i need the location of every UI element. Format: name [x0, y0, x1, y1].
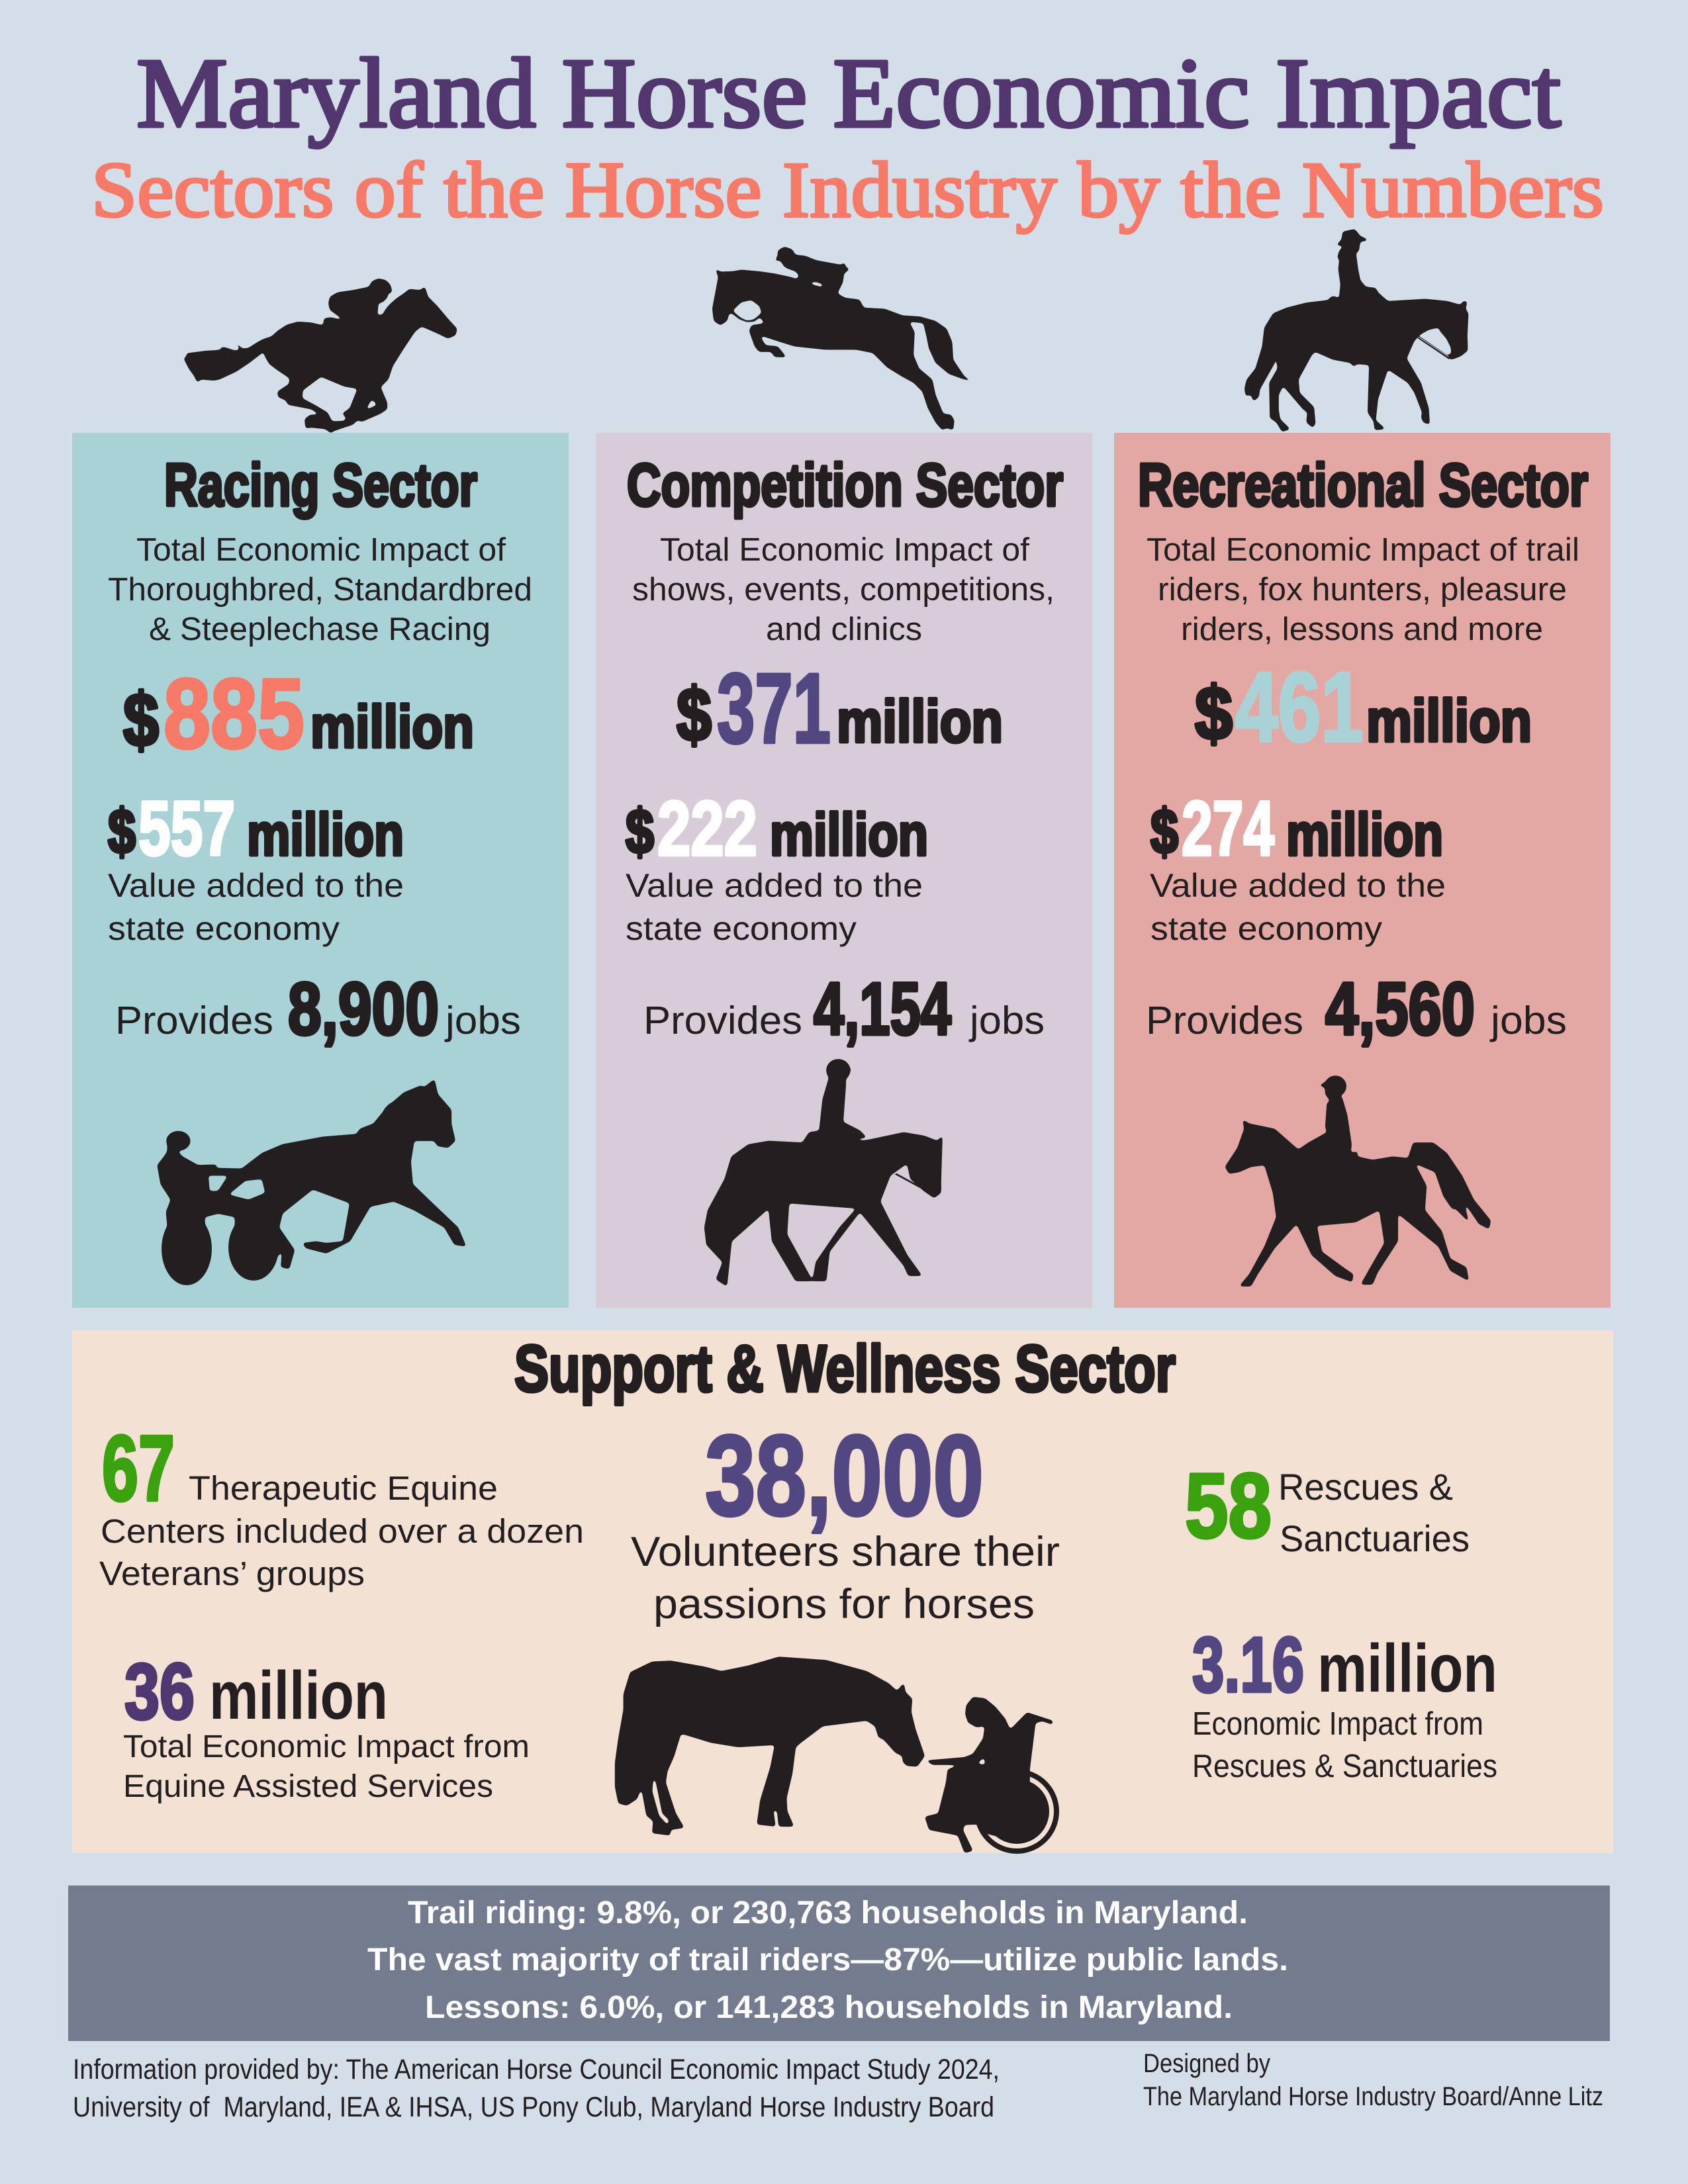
- rescues economic impact stat: Rescues & Sanctuaries: [1192, 1749, 1497, 1784]
- racing value added: $: [108, 797, 136, 867]
- recreational jobs: 4,560: [1325, 968, 1475, 1050]
- icon: pony and young rider: [1225, 1075, 1491, 1287]
- racing jobs: Provides: [115, 999, 273, 1042]
- equine assisted services stat: 36: [124, 1647, 195, 1736]
- heading: competition sector: Competition Sector: [627, 452, 1063, 519]
- icon: english rider walking: [704, 1059, 942, 1287]
- recreational jobs: [1146, 968, 1567, 1050]
- competition total impact: $: [677, 673, 712, 757]
- racing value added: state economy: [108, 910, 340, 947]
- panel: recreational sector: [1114, 433, 1611, 1308]
- heading: support and wellness sector: Support & Wellness Sector: [514, 1332, 1176, 1405]
- racing value added: 557: [138, 785, 235, 872]
- competition value added: state economy: [626, 910, 857, 947]
- rescues economic impact stat: 3.16: [1192, 1621, 1304, 1709]
- icon: horse with wheelchair user: [615, 1657, 1056, 1853]
- racing description: Thoroughbred, Standardbred: [108, 572, 532, 608]
- competition jobs: [643, 968, 1045, 1050]
- icon: western rider: [1244, 229, 1468, 432]
- therapeutic centers stat: Therapeutic Equine: [189, 1469, 498, 1507]
- rescues stat: Sanctuaries: [1280, 1518, 1470, 1559]
- rescues stat: [1185, 1455, 1470, 1559]
- recreational jobs: Provides: [1146, 999, 1303, 1042]
- recreational total impact: $: [1195, 672, 1233, 756]
- rescues economic impact stat: Economic Impact from: [1192, 1706, 1483, 1742]
- racing value added: [108, 785, 404, 947]
- recreational value added: Value added to the: [1150, 867, 1446, 904]
- competition value added: $: [626, 797, 654, 867]
- designer credits: Designed by: [1143, 2049, 1270, 2078]
- competition value added: million: [770, 802, 928, 868]
- competition description: Total Economic Impact of: [660, 532, 1029, 568]
- equine assisted services stat: Equine Assisted Services: [123, 1769, 493, 1804]
- racing total impact: 885: [164, 658, 305, 769]
- competition value added: Value added to the: [626, 867, 923, 904]
- designer credits: The Maryland Horse Industry Board/Anne Litz: [1143, 2082, 1603, 2111]
- racing jobs: 8,900: [288, 968, 439, 1050]
- equine assisted services stat: million: [209, 1657, 388, 1733]
- icon: show jumper: [712, 247, 974, 430]
- designer credits: [1143, 2049, 1603, 2111]
- competition jobs: jobs: [968, 999, 1045, 1042]
- source credits: Information provided by: The American Horse Council Economic Impact Study 2024,: [73, 2054, 1000, 2085]
- volunteers stat: 38,000: [705, 1411, 984, 1539]
- subtitle: Sectors of the Horse Industry by the Numbers: [91, 146, 1604, 234]
- racing description: Total Economic Impact of: [136, 532, 506, 568]
- competition description: [632, 532, 1055, 647]
- competition jobs: Provides: [643, 999, 802, 1042]
- competition total impact: 371: [717, 653, 831, 764]
- volunteers stat: Volunteers share their: [631, 1529, 1060, 1575]
- volunteers stat: [631, 1411, 1060, 1627]
- racing jobs: jobs: [444, 999, 521, 1042]
- title: Maryland Horse Economic Impact: [136, 38, 1561, 148]
- equine assisted services stat: Total Economic Impact from: [123, 1729, 530, 1764]
- volunteers stat: passions for horses: [653, 1581, 1035, 1627]
- therapeutic centers stat: [99, 1416, 584, 1592]
- competition description: shows, events, competitions,: [632, 572, 1055, 608]
- racing value added: million: [247, 802, 404, 868]
- icon: harness racer: [158, 1079, 466, 1285]
- trail riding facts text: The vast majority of trail riders—87%—utilize public lands.: [367, 1942, 1288, 1978]
- racing total impact: [123, 658, 474, 769]
- trail riding facts text: Trail riding: 9.8%, or 230,763 households in Maryland.: [408, 1895, 1248, 1931]
- recreational value added: 274: [1182, 785, 1274, 872]
- recreational total impact: 461: [1235, 651, 1364, 762]
- recreational value added: $: [1150, 797, 1178, 867]
- racing total impact: million: [310, 694, 474, 760]
- panel: support and wellness sector: [72, 1330, 1613, 1853]
- trail riding facts text: [367, 1895, 1288, 2025]
- competition jobs: 4,154: [814, 968, 951, 1050]
- therapeutic centers stat: 67: [102, 1416, 175, 1520]
- icon: racehorse and jockey: [183, 279, 457, 433]
- rescues economic impact stat: million: [1317, 1630, 1497, 1706]
- equine assisted services stat: [123, 1647, 530, 1804]
- heading: recreational sector: Recreational Sector: [1138, 452, 1588, 519]
- recreational description: riders, fox hunters, pleasure: [1158, 572, 1567, 608]
- therapeutic centers stat: Veterans’ groups: [99, 1555, 365, 1592]
- panel: trail riding facts band: [68, 1886, 1610, 2041]
- rescues economic impact stat: [1192, 1621, 1497, 1784]
- racing value added: Value added to the: [108, 867, 404, 904]
- source credits: [73, 2054, 1000, 2123]
- recreational jobs: jobs: [1489, 999, 1567, 1042]
- recreational description: Total Economic Impact of trail: [1147, 532, 1579, 568]
- competition value added: [626, 785, 928, 947]
- racing total impact: $: [123, 678, 159, 762]
- recreational description: [1147, 532, 1579, 647]
- racing description: & Steeplechase Racing: [149, 612, 491, 647]
- rescues stat: Rescues &: [1278, 1466, 1453, 1508]
- panel: competition sector: [596, 433, 1092, 1308]
- source credits: University of Maryland, IEA & IHSA, US Pony Club, Maryland Horse Industry Board: [73, 2091, 994, 2123]
- competition description: and clinics: [766, 612, 922, 647]
- rescues stat: 58: [1185, 1455, 1272, 1557]
- recreational description: riders, lessons and more: [1181, 612, 1543, 647]
- heading: racing sector: Racing Sector: [164, 452, 477, 519]
- recreational total impact: [1195, 651, 1532, 762]
- competition value added: 222: [657, 785, 757, 872]
- therapeutic centers stat: Centers included over a dozen: [101, 1512, 584, 1550]
- competition total impact: million: [837, 689, 1003, 755]
- racing description: [108, 532, 532, 647]
- trail riding facts text: Lessons: 6.0%, or 141,283 households in Maryland.: [425, 1990, 1233, 2025]
- recreational total impact: million: [1366, 688, 1532, 754]
- recreational value added: [1150, 785, 1446, 947]
- recreational value added: million: [1286, 802, 1443, 868]
- competition total impact: [677, 653, 1003, 764]
- recreational value added: state economy: [1150, 910, 1382, 947]
- panel: racing sector: [72, 433, 569, 1308]
- racing jobs: [115, 968, 521, 1050]
